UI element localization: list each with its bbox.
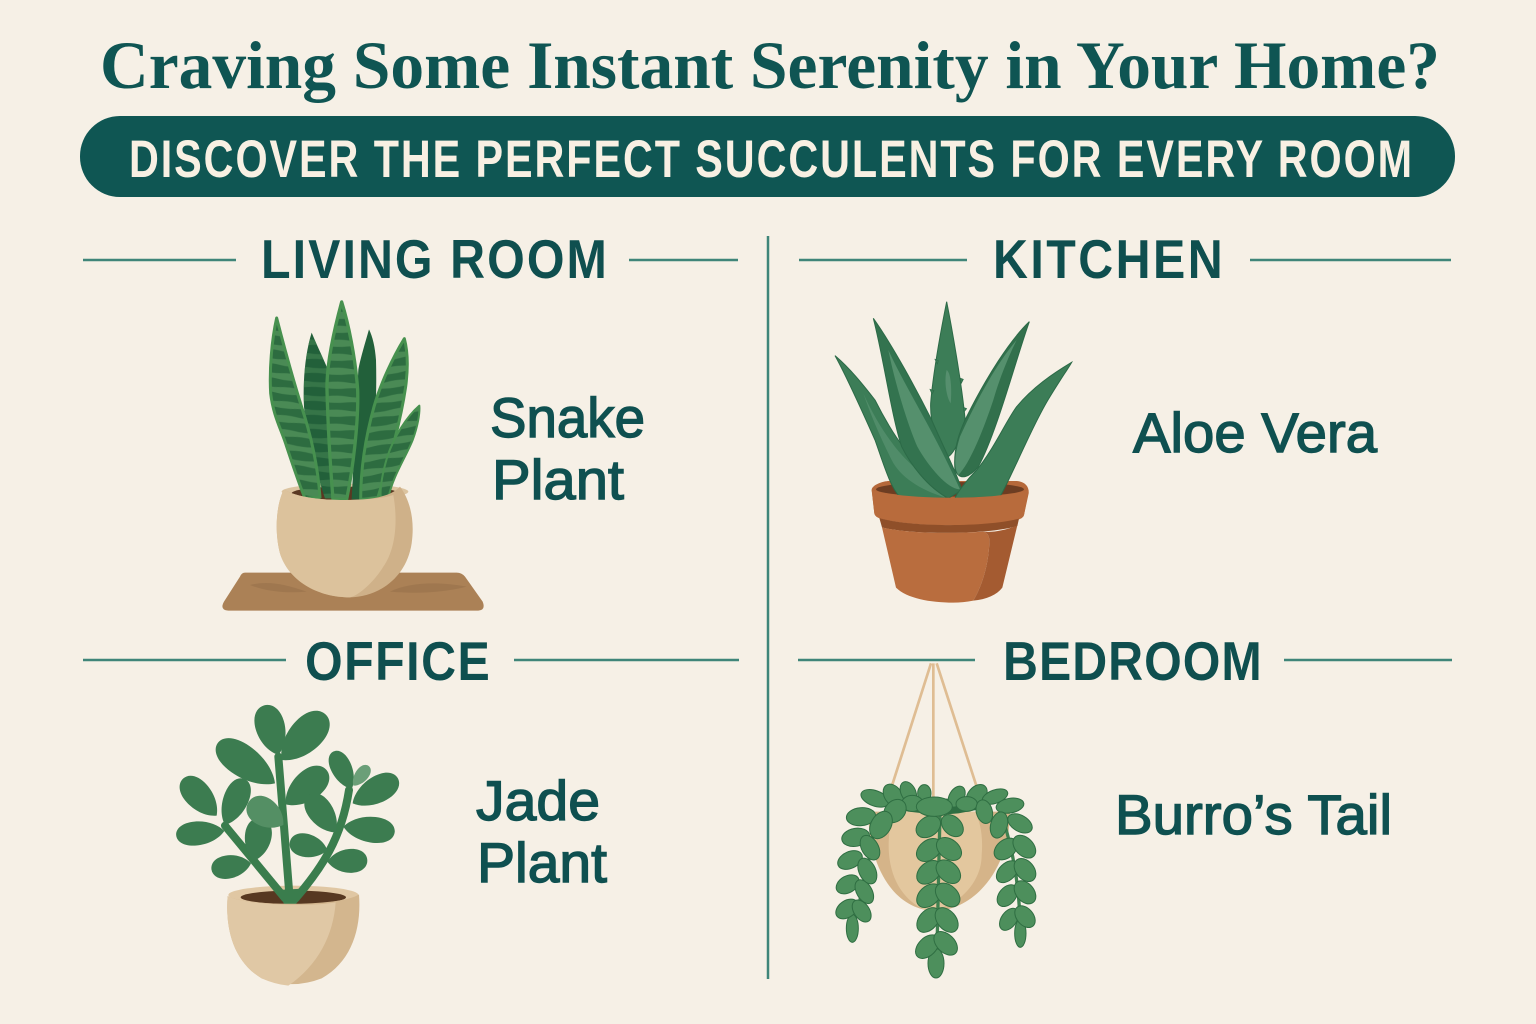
label: snake plant: Snake: [490, 386, 645, 449]
label: snake plant: Plant: [492, 448, 624, 511]
label: burro's tail: Burro’s Tail: [1115, 783, 1392, 846]
label: aloe vera: Aloe Vera: [1133, 401, 1378, 464]
left strand: [846, 914, 858, 942]
icon: jade plant in beige pot: [173, 701, 404, 986]
panel: bedroom: [832, 630, 1392, 978]
panel: living room: [222, 228, 645, 611]
title: Craving Some Instant Serenity in Your Home?: [100, 27, 1440, 103]
label: jade plant: Plant: [477, 831, 607, 894]
subtitle banner: DISCOVER THE PERFECT SUCCULENTS FOR EVERY ROOM: [129, 130, 1412, 189]
heading: kitchen: KITCHEN: [993, 228, 1223, 290]
heading: bedroom: BEDROOM: [1003, 630, 1262, 692]
panel: kitchen: [835, 228, 1378, 603]
icon: burro's tail in hanging planter: [832, 663, 1040, 978]
right strand: [1015, 919, 1026, 947]
subtitle banner: [80, 116, 1455, 197]
label: jade plant: Jade: [476, 769, 600, 832]
label: snake plant: [490, 386, 645, 511]
panel: office: [173, 630, 607, 986]
heading: office: OFFICE: [305, 630, 490, 692]
heading: living room: LIVING ROOM: [261, 228, 607, 290]
rim foliage: [859, 786, 891, 811]
center strand: [928, 949, 944, 978]
icon: snake plant on wooden shelf: [222, 302, 484, 611]
icon: aloe vera in terracotta pot: [835, 302, 1072, 603]
label: jade plant: [476, 769, 607, 894]
